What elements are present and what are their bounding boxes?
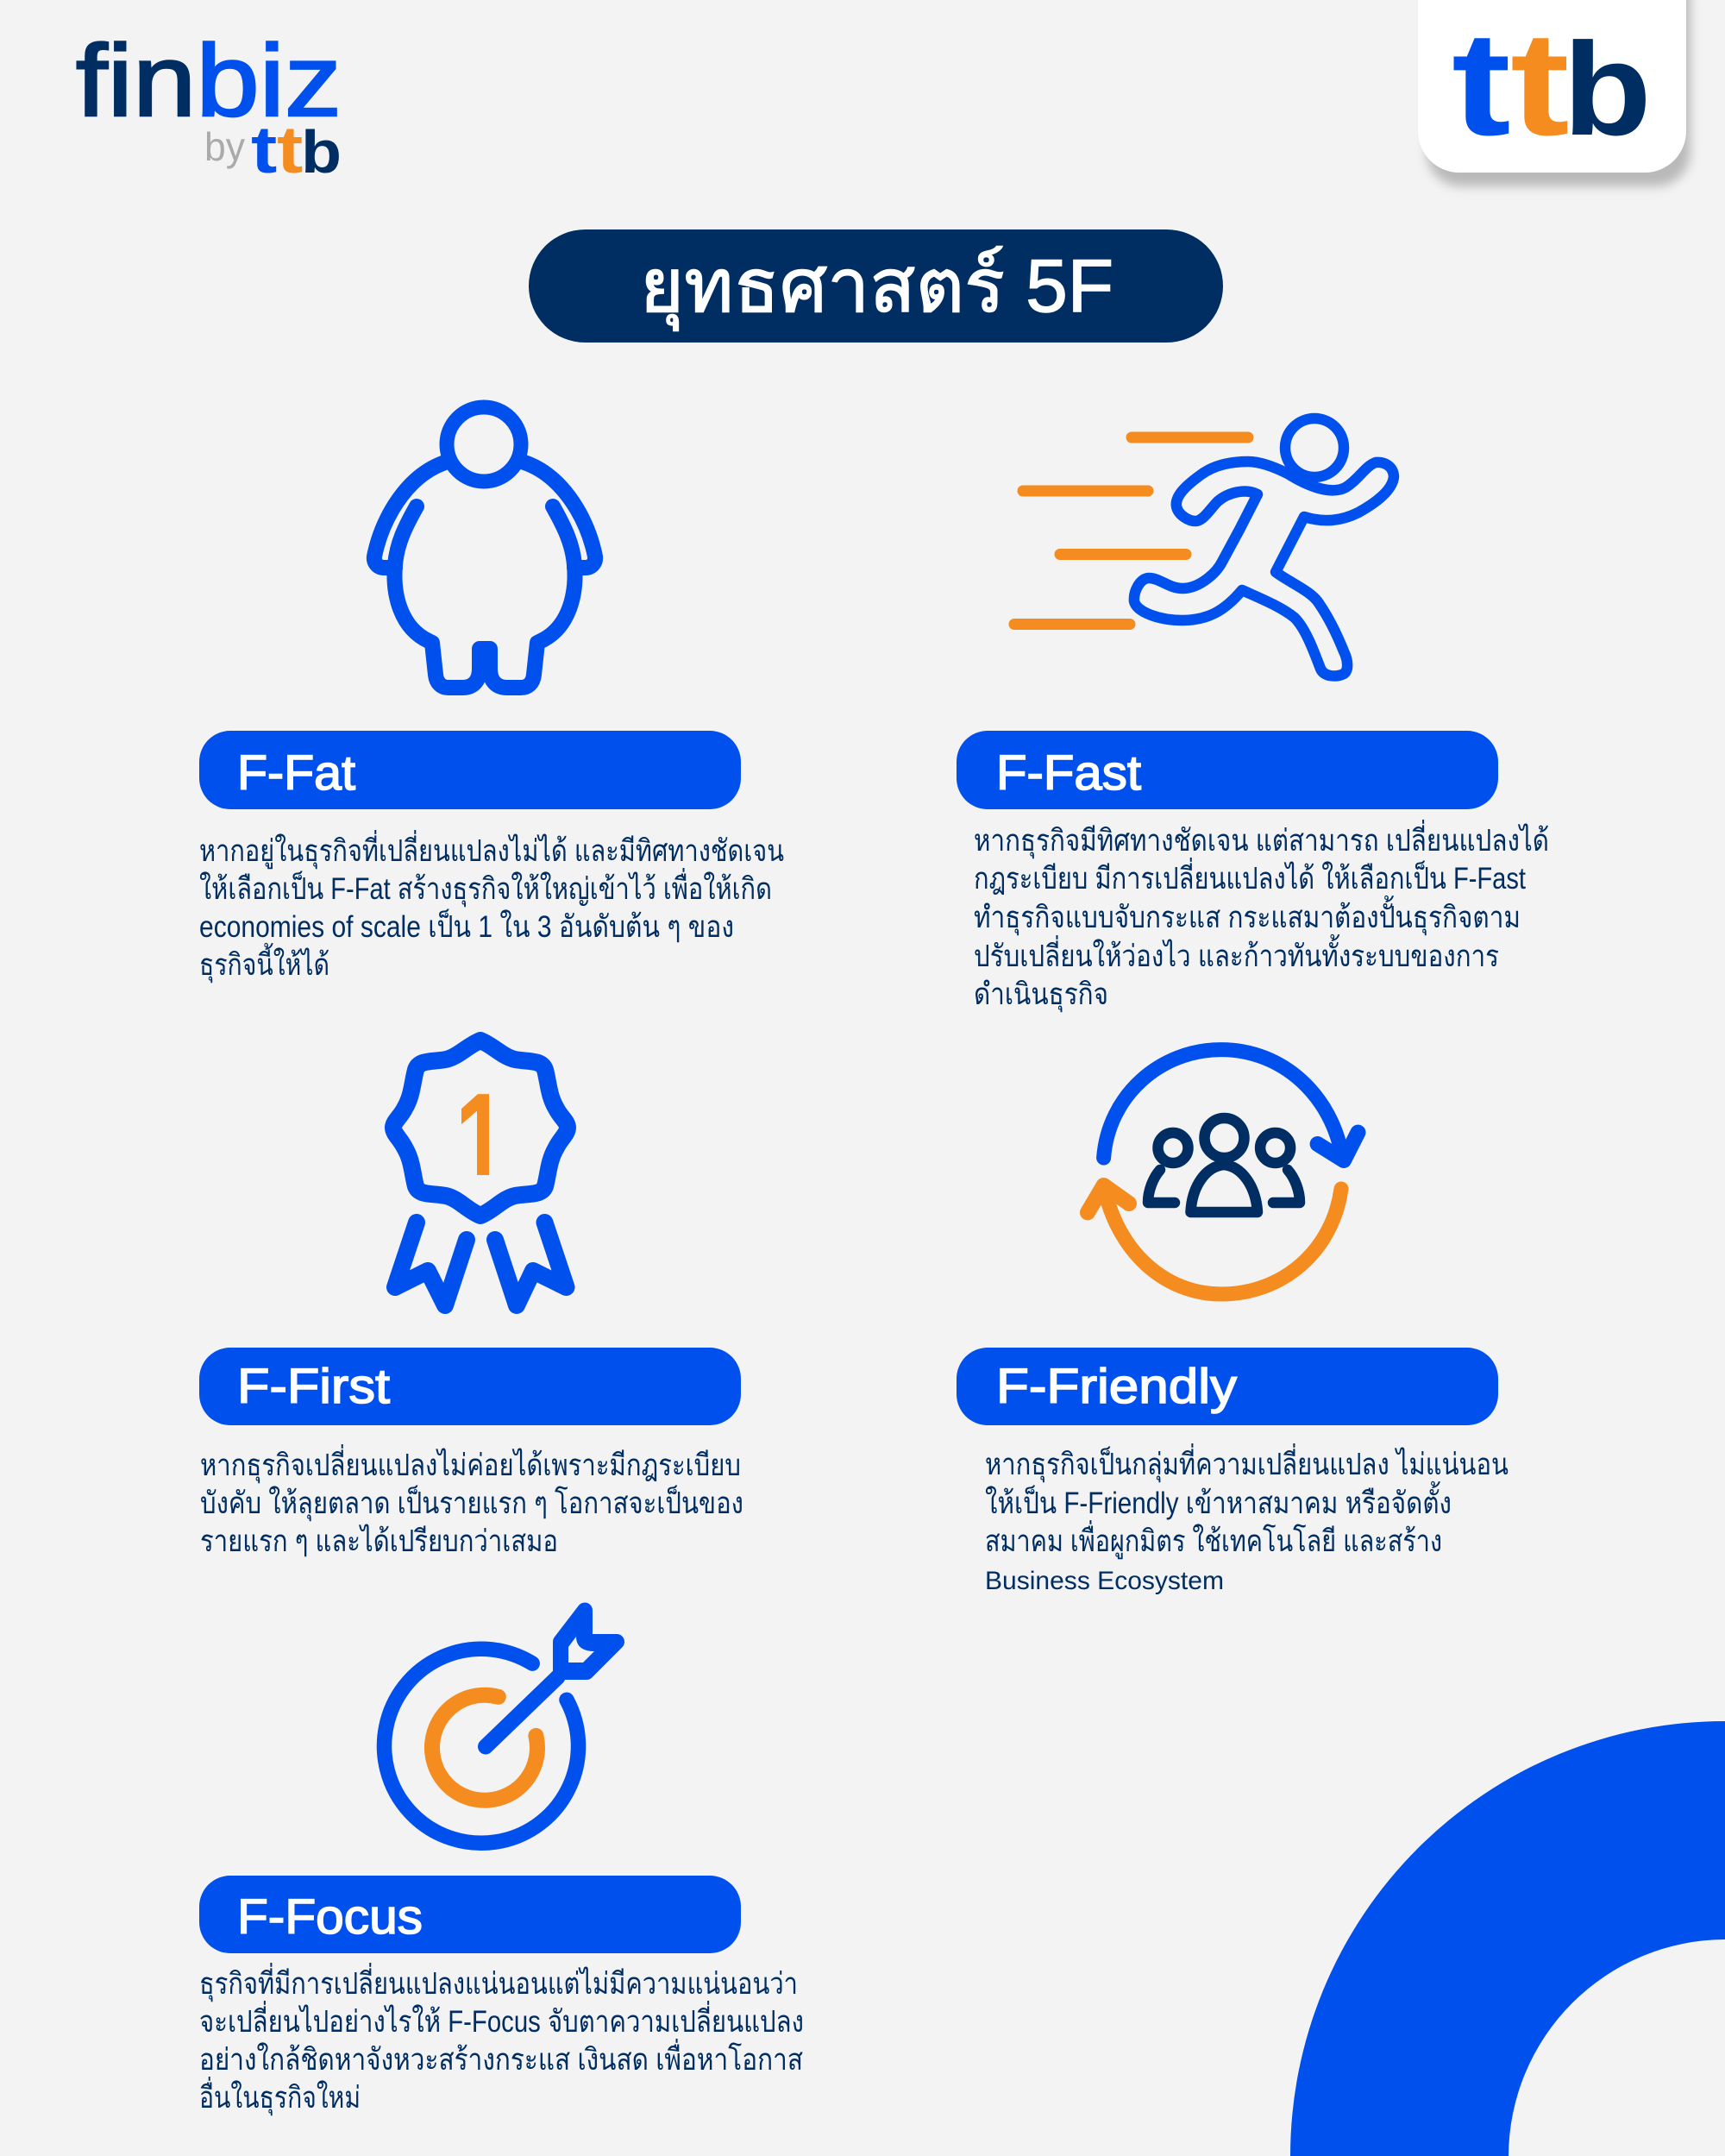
body text: F-Focus: จะเปลี่ยนไปอย่างไรให้ F-Focus จับตาความเปลี่ยนแปลง xyxy=(199,2001,804,2039)
logo: small ttb xyxy=(251,113,342,186)
heading bar: F-Fat xyxy=(199,731,741,809)
body text: F-Fat: ธุรกิจนี้ให้ได้ xyxy=(199,942,329,983)
body text: F-First: หากธุรกิจเปลี่ยนแปลงไม่ค่อยได้เพราะมีกฎระเบียบ xyxy=(200,1444,741,1483)
logo text: ttb: b xyxy=(1563,16,1652,163)
panel: F-Fat xyxy=(199,407,784,983)
body text: F-Fast: กฎระเบียบ มีการเปลี่ยนแปลงได้ ให้เลือกเป็น F-Fast xyxy=(974,858,1526,896)
body text: F-Friendly xyxy=(985,1443,1509,1595)
body text: F-First: บังคับ ให้ลุยตลาด เป็นรายแรก ๆ โอกาสจะเป็นของ xyxy=(200,1485,743,1521)
heading bar: F-Fat: F-Fat xyxy=(237,745,355,801)
body text: F-Fast: ดำเนินธุรกิจ xyxy=(974,977,1108,1012)
body text: F-Focus: อื่นในธุรกิจใหม่ xyxy=(199,2077,361,2115)
body text: F-Fast xyxy=(974,820,1549,1012)
body text: F-Fast: ทำธุรกิจแบบจับกระแส กระแสมาต้องปั้นธุรกิจตาม xyxy=(974,895,1521,935)
body text: F-Focus: ธุรกิจที่มีการเปลี่ยนแปลงแน่นอนแต่ไม่มีความแน่นอนว่า xyxy=(199,1963,798,2002)
body text: F-Friendly: หากธุรกิจเป็นกลุ่มที่ความเปลี่ยนแปลง ไม่แน่นอน xyxy=(985,1443,1509,1482)
body text: F-Fat: หากอยู่ในธุรกิจที่เปลี่ยนแปลงไม่ได้ และมีทิศทางชัดเจน xyxy=(199,830,784,869)
logo text: ttb: t xyxy=(1452,2,1511,167)
logo wordmark: finbiz: finbiz xyxy=(76,24,342,138)
heading bar: F-Friendly: F-Friendly xyxy=(996,1359,1238,1414)
heading bar: F-First: F-First xyxy=(237,1359,390,1414)
logo text: ttb xyxy=(1452,2,1652,167)
heading bar: F-Focus xyxy=(199,1876,741,1953)
title: ยุทธศาสตร์ 5F xyxy=(640,245,1113,331)
body text: F-First: รายแรก ๆ และได้เปรียบกว่าเสมอ xyxy=(200,1524,558,1558)
body text: F-Focus xyxy=(199,1963,804,2115)
body text: F-First xyxy=(200,1444,743,1558)
body text: F-Fast: ปรับเปลี่ยนให้ว่องไว และก้าวทันทั้งระบบของการ xyxy=(974,933,1499,973)
logo: by: by xyxy=(204,124,245,169)
icon: people with cycle arrows xyxy=(1088,1050,1358,1294)
decorative quarter ring xyxy=(1290,1721,1725,2156)
body text: F-Friendly: Business Ecosystem xyxy=(985,1567,1224,1595)
panel: F-First xyxy=(199,1040,743,1558)
body text: F-Fat: ให้เลือกเป็น F-Fat สร้างธุรกิจให้ใหญ่เข้าไว้ เพื่อให้เกิด xyxy=(199,868,772,907)
logo: finbiz by ttb xyxy=(76,24,342,186)
logo: small ttb: t xyxy=(251,113,277,186)
heading bar: F-Friendly xyxy=(957,1348,1498,1425)
logo text: ttb: t xyxy=(1510,2,1570,167)
body text: F-Friendly: สมาคม เพื่อผูกมิตร ใช้เทคโนโลยี และสร้าง xyxy=(985,1520,1442,1559)
logo card: ttb xyxy=(1418,0,1690,186)
icon: target with arrow xyxy=(385,1610,617,1843)
body text: F-Focus: อย่างใกล้ชิดหาจังหวะสร้างกระแส เงินสด เพื่อหาโอกาส xyxy=(199,2039,803,2077)
heading bar: F-First xyxy=(199,1348,741,1425)
icon: running person xyxy=(1014,418,1394,676)
body text: F-Fat xyxy=(199,830,784,983)
heading bar: F-Focus: F-Focus xyxy=(237,1889,423,1945)
heading bar: F-Fast: F-Fast xyxy=(996,745,1141,801)
body text: F-Fat: economies of scale เป็น 1 ใน 3 อันดับต้น ๆ ของ xyxy=(199,908,734,944)
panel: F-Focus xyxy=(199,1610,804,2115)
icon: fat person xyxy=(374,407,595,688)
body text: F-Fast: หากธุรกิจมีทิศทางชัดเจน แต่สามารถ เปลี่ยนแปลงได้ xyxy=(974,820,1549,858)
medal number: 1 xyxy=(453,1063,511,1224)
heading bar: F-Fast xyxy=(957,731,1498,809)
logo: small ttb: t xyxy=(277,113,303,186)
panel: F-Fast xyxy=(957,418,1549,1012)
logo: small ttb: b xyxy=(301,117,342,185)
panel: F-Friendly xyxy=(957,1050,1509,1595)
icon: medal xyxy=(393,1040,568,1305)
body text: F-Friendly: ให้เป็น F-Friendly เข้าหาสมาคม หรือจัดตั้ง xyxy=(985,1480,1452,1520)
title xyxy=(529,229,1223,343)
